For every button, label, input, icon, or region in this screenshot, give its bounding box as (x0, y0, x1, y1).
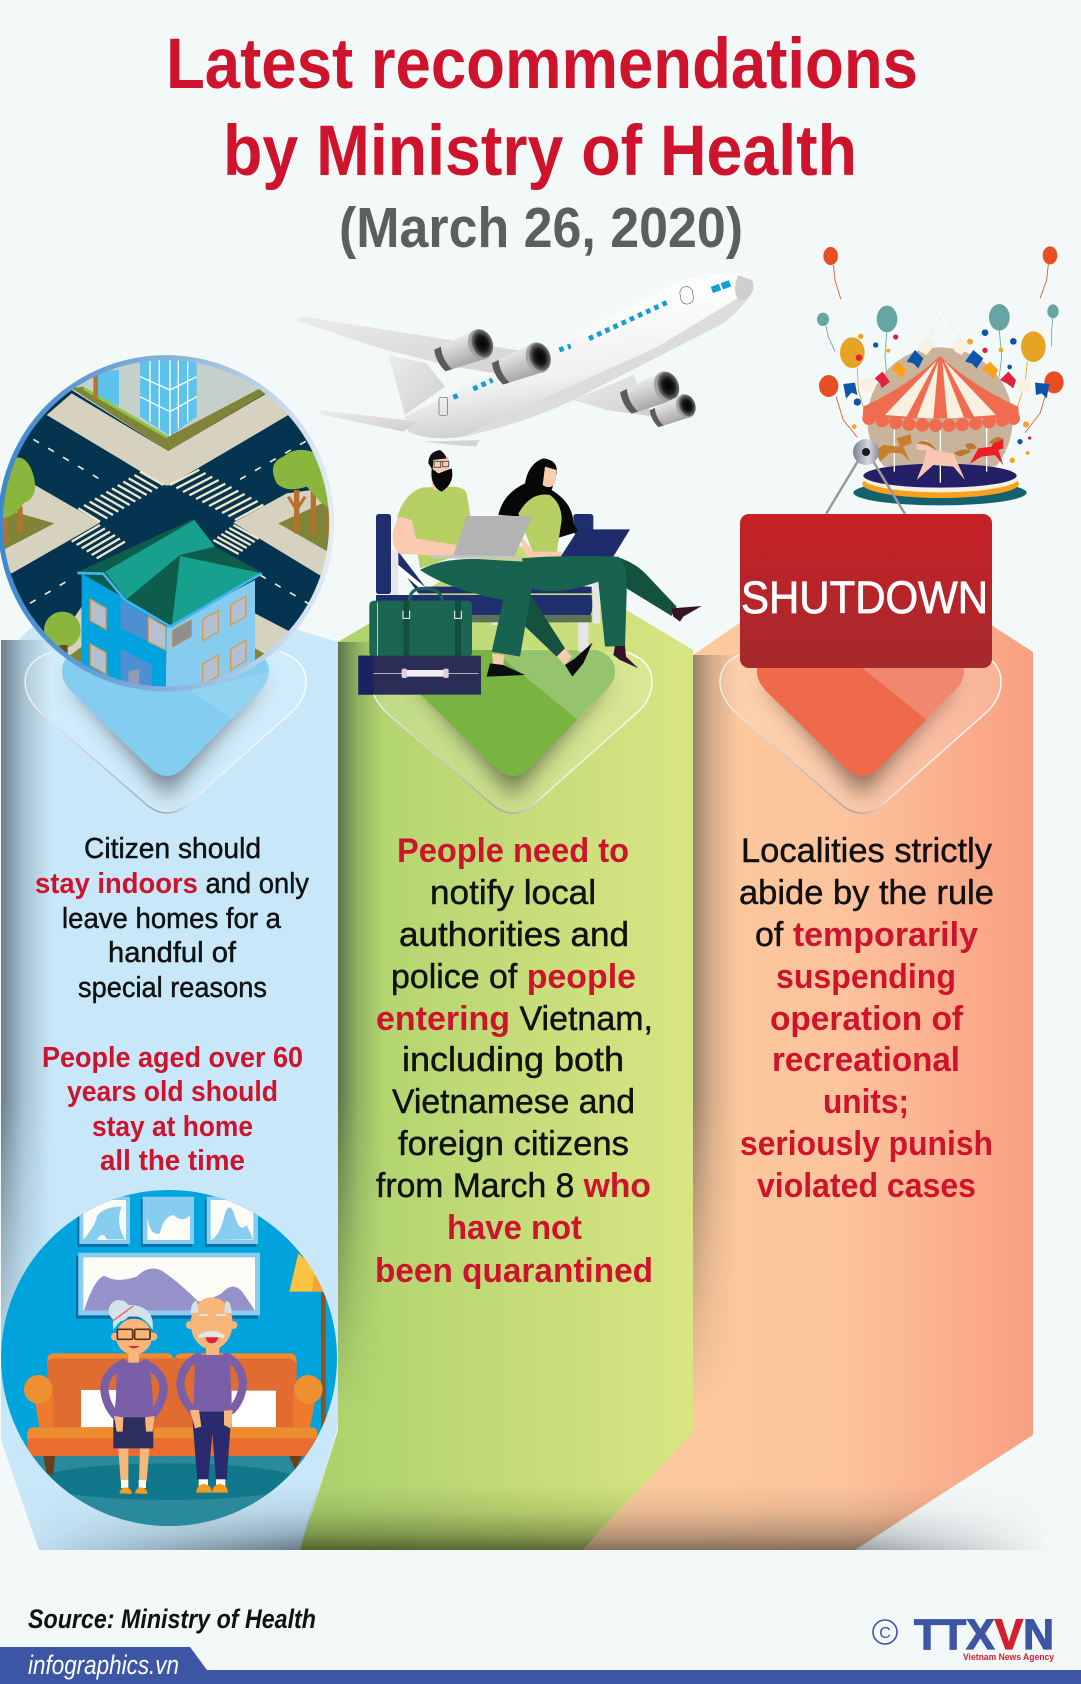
backdrop and base (868, 347, 1012, 467)
house (77, 519, 262, 693)
woman (498, 458, 702, 668)
text block: stay indoors: stay indoors and only (35, 868, 309, 900)
man (392, 450, 593, 677)
floor lamp (289, 1253, 326, 1433)
logo: TTXVN: C (879, 1625, 891, 1642)
balloons (826, 264, 1053, 437)
footer bar: infographics.vn (28, 1650, 179, 1680)
right ground shadow (855, 1506, 1032, 1550)
circle rim (0, 358, 332, 689)
horses (877, 434, 1003, 480)
panel: entry (green) (300, 540, 693, 1550)
title: Latest recommendations (166, 25, 918, 104)
text block: notify authorities: foreign citizens (398, 1125, 629, 1163)
source line: Source: Ministry of Health (28, 1604, 316, 1634)
canopy (862, 356, 1020, 432)
text block: notify authorities: authorities and (399, 916, 629, 954)
text block: notify authorities: People need to (397, 832, 629, 870)
text block: people over 60: years old should (67, 1076, 278, 1108)
trees (0, 450, 337, 655)
subtitle: date: (March 26, 2020) (339, 196, 743, 260)
text block: notify authorities: notify local (430, 874, 596, 912)
sidewalks (47, 393, 290, 486)
footer bar (0, 1647, 1081, 1684)
luggage (358, 588, 481, 695)
title: by Ministry of Health (223, 112, 857, 191)
panel: citizens (blue) (1, 590, 338, 1550)
road lane marks (30, 435, 317, 608)
illustration: street and house in circle (0, 353, 337, 693)
text block: people over 60 (42, 1042, 303, 1177)
text block: suspend recreational units: operation of (770, 1000, 964, 1038)
panel: shutdown (orange) (583, 540, 1033, 1550)
text block: suspend recreational units: of temporarily (755, 916, 978, 954)
bench (376, 514, 600, 652)
text block: people over 60: all the time (100, 1145, 245, 1177)
text block: notify authorities: have not (447, 1209, 582, 1247)
poles (894, 427, 987, 483)
grandmother (104, 1300, 164, 1494)
logo: TTXVN: TTXVN (914, 1611, 1054, 1659)
illustration: elderly couple on sofa (0, 1187, 340, 1533)
text block: notify authorities: been quarantined (375, 1252, 653, 1290)
illustration: travellers on bench (358, 450, 702, 695)
confetti (852, 329, 1031, 463)
text block: notify authorities: entering Vietnam, (376, 1000, 653, 1038)
diamond: orange (720, 650, 1001, 813)
title (166, 25, 918, 191)
text block: stay indoors: handful of (108, 937, 237, 969)
diamond: blue (25, 650, 306, 813)
text block: suspend recreational units: recreational (772, 1041, 960, 1079)
grandfather (180, 1297, 243, 1493)
text block: notify authorities: Vietnamese and (392, 1083, 635, 1121)
text block: suspend recreational units: suspending (776, 958, 956, 996)
logo: TTXVN: Vietnam News Agency (963, 1652, 1055, 1663)
illustration: carousel and balloons (817, 246, 1064, 505)
wall pictures (76, 1197, 260, 1319)
hanging wires and knob (826, 439, 905, 514)
text block: stay indoors (35, 833, 309, 1004)
text block: stay indoors: Citizen should (84, 833, 261, 865)
text block: notify authorities (375, 832, 653, 1290)
text block: suspend recreational units: units; (823, 1083, 909, 1121)
text block: notify authorities: from March 8 who (376, 1167, 651, 1205)
text block: stay indoors: leave homes for a (62, 903, 282, 935)
text block: suspend recreational units: seriously punish (740, 1125, 993, 1163)
floor (32, 1456, 306, 1526)
text block: notify authorities: including both (402, 1041, 624, 1079)
bunting flags (843, 313, 1049, 399)
sofa (24, 1353, 323, 1475)
building block behind the junction (72, 360, 265, 451)
shutdown sign: SHUTDOWN (741, 572, 988, 623)
text block: stay indoors: special reasons (78, 972, 267, 1004)
crosswalks (72, 470, 263, 558)
shutdown sign (740, 439, 992, 668)
text block: suspend recreational units: violated cases (757, 1167, 976, 1205)
text block: suspend recreational units: abide by the rule (739, 874, 994, 912)
text block: suspend recreational units (739, 832, 994, 1205)
diamond: green (371, 648, 652, 813)
text block: people over 60: People aged over 60 (42, 1042, 303, 1074)
text block: notify authorities: police of people (391, 958, 636, 996)
illustration: airplane (295, 273, 754, 447)
text block: people over 60: stay at home (92, 1111, 253, 1143)
text block: suspend recreational units: Localities strictly (741, 832, 992, 870)
